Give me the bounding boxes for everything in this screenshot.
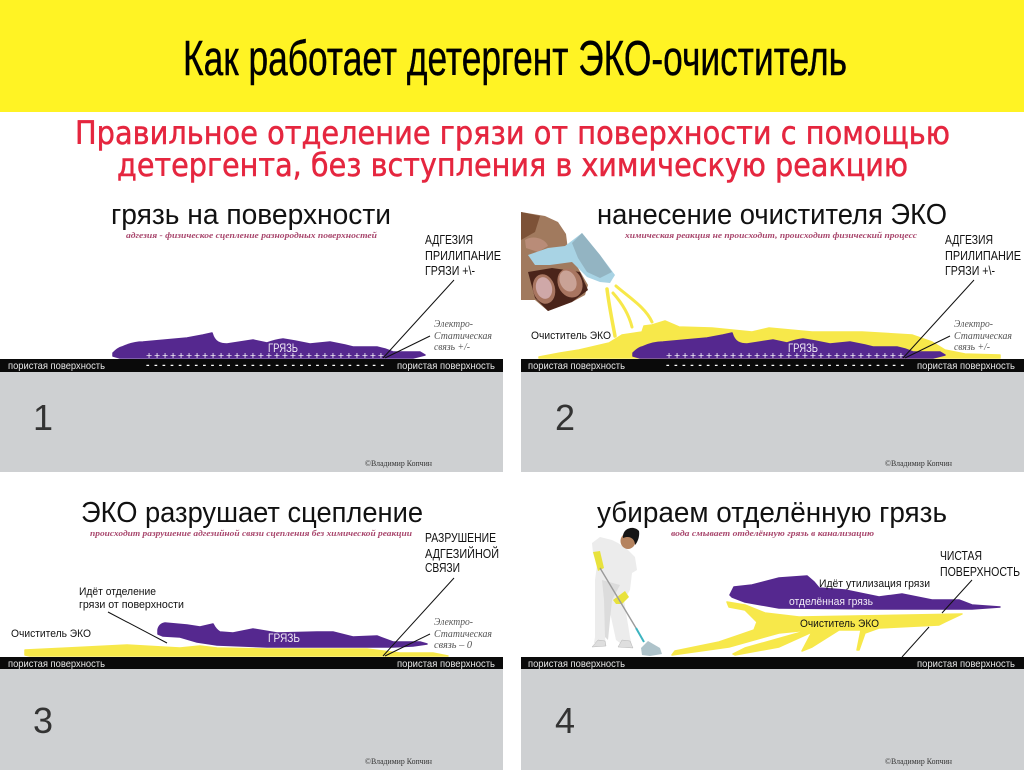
- electrostatic label 1: Электро-: [434, 319, 473, 330]
- cleaner label 3: Очиститель ЭКО: [11, 628, 91, 640]
- adhesion label 2: АДГЕЗИЯ: [945, 232, 993, 247]
- text: disposal: Идёт утилизация грязи: [819, 578, 930, 590]
- number 3: 3: [33, 700, 53, 741]
- separation label: грязи от поверхности: [79, 599, 184, 611]
- adhesion label 2: ГРЯЗИ +\-: [945, 263, 995, 278]
- icon: hand with bottle: [521, 212, 615, 311]
- panel 1: dirt on surface: [0, 199, 503, 472]
- electrostatic label 2: [954, 319, 1012, 353]
- surface 3: пористая поверхность: [397, 658, 495, 670]
- copyright 2: ©Владимир Копчин: [885, 459, 953, 468]
- breakdown label: РАЗРУШЕНИЕ: [425, 530, 496, 545]
- mop head: [641, 641, 662, 656]
- electrostatic label 1: [434, 319, 492, 353]
- surface 1: пористая поверхность: [397, 360, 495, 372]
- electrostatic label 3: [434, 617, 492, 651]
- charges 2: ++++++++++++++++++++++++++++++: [666, 350, 904, 362]
- leader lines 2: [903, 280, 974, 358]
- shoes: [592, 640, 606, 647]
- charges 2: ------------------------------: [666, 359, 904, 371]
- surface 4: пористая поверхность: [528, 658, 625, 670]
- dirt label 2: ГРЯЗЬ: [788, 341, 818, 355]
- heading 4: убираем отделённую грязь: [597, 497, 947, 529]
- heading 3: ЭКО разрушает сцепление: [81, 497, 423, 529]
- clean surface label: [940, 548, 1020, 579]
- clean surface label: ЧИСТАЯ: [940, 548, 982, 563]
- breakdown label: АДГЕЗИЙНОЙ: [425, 546, 499, 561]
- adhesion label 1: ПРИЛИПАНИЕ: [425, 248, 501, 263]
- separation leader: [108, 612, 167, 643]
- grey block 4: [521, 669, 1024, 770]
- copyright 4: ©Владимир Копчин: [885, 757, 953, 766]
- breakdown label: [425, 530, 499, 575]
- caption 1: адгезия - физическое сцепление разнородных поверхностей: [126, 231, 378, 240]
- breakdown label: СВЯЗИ: [425, 560, 460, 575]
- caption 4: вода смывает отделённую грязь в канализацию: [671, 529, 874, 538]
- body and legs: [592, 537, 637, 645]
- shirt shading: [602, 580, 620, 640]
- caption 2: химическая реакция не происходит, происходит физический процесс: [624, 231, 918, 240]
- surface 4: [521, 657, 1024, 670]
- leader lines 4: [902, 580, 972, 657]
- electrostatic label 3: Статическая: [434, 629, 492, 640]
- copyright 3: ©Владимир Копчин: [365, 757, 433, 766]
- electrostatic label 1: Статическая: [434, 331, 492, 342]
- charges 2: [666, 350, 904, 371]
- mop pole: [600, 568, 636, 628]
- cleaner film 3: [25, 645, 448, 656]
- grey block 3: [0, 669, 503, 770]
- grey block 2: [521, 372, 1024, 472]
- separation label: Идёт отделение: [79, 586, 156, 598]
- surface 3: [0, 657, 503, 670]
- adhesion label 1: ГРЯЗИ +\-: [425, 263, 475, 278]
- number 4: 4: [555, 700, 575, 741]
- charges 1: [146, 350, 384, 371]
- grey block 1: [0, 372, 503, 472]
- electrostatic label 1: связь +/-: [434, 342, 470, 353]
- adhesion label 1: [425, 232, 501, 278]
- charges 1: ------------------------------: [146, 359, 384, 371]
- number 1: 1: [33, 397, 53, 438]
- adhesion label 2: [945, 232, 1021, 278]
- heading 2: нанесение очистителя ЭКО: [597, 199, 947, 231]
- red subtitle: Правильное отделение грязи от поверхности с помощью: [75, 114, 950, 152]
- charges 1: ++++++++++++++++++++++++++++++: [146, 350, 384, 362]
- dirt blob 2: [633, 333, 945, 358]
- cleaner splatter: [672, 602, 962, 655]
- electrostatic label 3: связь – 0: [434, 640, 473, 651]
- hair: [623, 528, 639, 545]
- dirt label 3: ГРЯЗЬ: [268, 631, 300, 645]
- dirt label 1: ГРЯЗЬ: [268, 341, 298, 355]
- surface 1: пористая поверхность: [8, 360, 105, 372]
- electrostatic label 3: Электро-: [434, 617, 473, 628]
- surface 4: пористая поверхность: [917, 658, 1015, 670]
- surface 2: пористая поверхность: [917, 360, 1015, 372]
- dirt blob 1: [113, 333, 425, 358]
- text: cleaner 4: Очиститель ЭКО: [800, 618, 879, 630]
- surface 2: пористая поверхность: [528, 360, 625, 372]
- text: separated dirt: отделённая грязь: [789, 596, 873, 608]
- separation label: [79, 586, 184, 611]
- copyright 1: ©Владимир Копчин: [365, 459, 433, 468]
- electrostatic label 2: Электро-: [954, 319, 993, 330]
- surface 1: [0, 359, 503, 372]
- electrostatic label 2: связь +/-: [954, 342, 990, 353]
- panel 2: applying cleaner: [521, 199, 1024, 472]
- electrostatic label 2: Статическая: [954, 331, 1012, 342]
- leader lines 1: [383, 280, 454, 358]
- head: [620, 533, 636, 549]
- dirt blob 3: [158, 623, 427, 647]
- cleaner streams: [607, 286, 652, 336]
- gloves: [593, 551, 604, 571]
- leader lines 3: [383, 578, 454, 656]
- panel 3: eco breaks adhesion: [0, 497, 503, 770]
- heading 1: грязь на поверхности: [111, 199, 391, 231]
- cleaner label 2: Очиститель ЭКО: [531, 330, 611, 342]
- red subtitle: детергента, без вступления в химическую реакцию: [117, 146, 908, 184]
- surface 2: [521, 359, 1024, 372]
- panel 4: removing separated dirt: [521, 497, 1024, 770]
- surface 3: пористая поверхность: [8, 658, 105, 670]
- adhesion label 1: АДГЕЗИЯ: [425, 232, 473, 247]
- number 2: 2: [555, 397, 575, 438]
- header band: [0, 0, 1024, 112]
- icon: man with mop: [592, 528, 662, 656]
- cleaner blob 2: [539, 321, 1000, 358]
- caption 3: происходит разрушение адгезийной связи сцепления без химической реакции: [90, 529, 413, 538]
- separated dirt blob: [730, 576, 1000, 609]
- red subtitle: [75, 114, 950, 184]
